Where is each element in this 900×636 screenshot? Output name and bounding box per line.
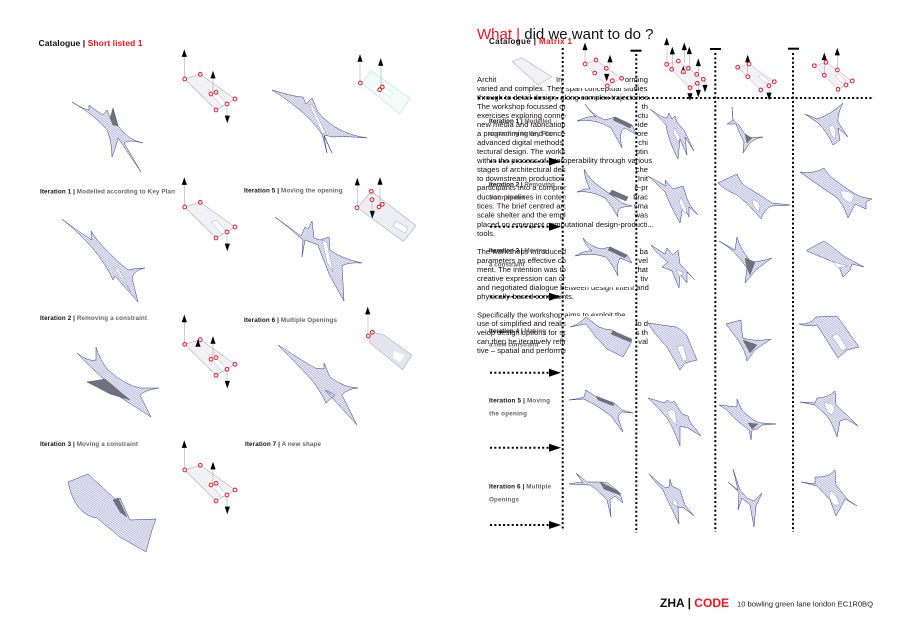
- body text: a programming and concep: [477, 129, 569, 138]
- form: iteration 5 lower surface: [275, 217, 362, 301]
- body text: vel: [638, 256, 648, 265]
- heading: Catalogue Matrix 1: Catalogue | Matrix 1: [489, 37, 573, 46]
- matrix: surfaces row 2: [577, 168, 872, 223]
- form: iteration 5 top surface: [272, 90, 367, 153]
- body text: velop design options for sp: [477, 328, 567, 337]
- body text: hat: [637, 265, 649, 274]
- control diagram: iteration 6: [365, 307, 412, 370]
- matrix: row labels: Iteration 6 | Multiple: [489, 484, 551, 490]
- body text: to downstream production.: [477, 174, 566, 183]
- control diagram: iteration 2: [182, 315, 237, 388]
- heading: Catalogue Short listed 1: Catalogue | Short listed 1: [38, 38, 143, 48]
- title: What did we want to do: What | did we want to do ?: [477, 26, 654, 43]
- body text: The workshop focussed on: [477, 102, 568, 111]
- matrix: row labels: a new constraint: [489, 342, 540, 348]
- body text: ptin: [636, 147, 648, 156]
- matrix: row labels: a constraint: [489, 194, 526, 202]
- matrix: row labels: Iteration 2 | Removing: [489, 182, 555, 188]
- left panel: iteration labels: [40, 188, 343, 448]
- body text: within the process of interoperability through various: [476, 156, 652, 165]
- body text: ctu: [638, 111, 648, 120]
- matrix: surfaces row 3: [575, 237, 864, 288]
- body text: stages of architectural desi: [477, 165, 568, 174]
- left panel: iteration labels: Iteration 2 | Removing a constraint: [40, 315, 148, 322]
- body text: tools.: [477, 229, 495, 238]
- matrix: row labels: a constraint: [489, 262, 526, 268]
- matrix: control diagram column 2: [664, 38, 708, 101]
- matrix: row labels: Iteration 1 | Modelled: [489, 118, 552, 125]
- body text: physically-based constraints.: [477, 292, 574, 301]
- matrix: row labels: Openings: [489, 496, 519, 504]
- body text: tectural design. The worksh: [477, 147, 570, 156]
- control diagram: green plan: [357, 54, 410, 114]
- body text: can then be iteratively refin: [477, 337, 568, 346]
- body text: brac: [633, 193, 648, 202]
- matrix: surfaces row 5: [569, 390, 858, 446]
- body text: ba: [640, 247, 649, 256]
- body text: tive – spatial and performa: [477, 346, 567, 355]
- control diagram: iteration 5: [355, 177, 416, 241]
- body text: through to detail design, along complex trajectories.: [477, 93, 650, 102]
- left panel: iteration labels: Iteration 6 | Multiple Openings: [244, 317, 337, 324]
- form: iteration 1 lower surface: [62, 219, 145, 302]
- body text: tiv: [640, 274, 648, 283]
- body text: placed on emergent computational design-producti...: [477, 220, 654, 229]
- control diagram: iteration 3: [182, 440, 237, 514]
- body text: chi: [638, 138, 648, 147]
- matrix: plan diagram header: [512, 58, 552, 85]
- matrix: dotted grid: [478, 48, 874, 533]
- body text: In: [556, 75, 562, 84]
- matrix: control diagram column 1: [582, 42, 624, 88]
- body text: was: [633, 211, 648, 220]
- body text: duction pipelines in contem: [477, 193, 569, 202]
- body text: and negotiated dialogue between design intent and: [477, 283, 649, 292]
- matrix: row labels: Iteration 5 | Moving: [489, 398, 550, 404]
- body text: use of simplified and realis: [477, 319, 567, 328]
- body text: ide: [638, 120, 648, 129]
- body text: parameters as effective co: [477, 256, 566, 265]
- control diagram: iteration 1 top: [182, 49, 237, 123]
- matrix: row arrows: [490, 158, 561, 529]
- matrix: surfaces row 6: [569, 469, 857, 527]
- body text: val: [638, 337, 648, 346]
- body text: Specifically the workshop aims to exploit the: [477, 311, 626, 320]
- body text: e-pr: [634, 183, 648, 192]
- body text: th: [642, 102, 648, 111]
- matrix: control diagram column 3: [736, 55, 776, 100]
- form: iteration 3 surface: [68, 474, 156, 552]
- control diagram: iteration 1 lower: [182, 177, 237, 251]
- body text: varied and complex. They span conceptual studies: [477, 84, 648, 93]
- body text: ore: [637, 129, 648, 138]
- form: iteration 2 surface: [77, 347, 159, 417]
- body text: Archit: [477, 75, 497, 84]
- body text: che: [636, 165, 648, 174]
- left panel: iteration labels: Iteration 1 | Modelled according to Key Plan: [40, 189, 175, 196]
- matrix: row labels: [489, 118, 555, 504]
- form: iteration 6 surface: [278, 345, 358, 425]
- matrix: surfaces row 1: [577, 103, 848, 159]
- matrix: surfaces row 4: [570, 316, 859, 370]
- body text: orming: [625, 75, 648, 84]
- footer: ZHA CODE address: 10 bowling green lane london EC1R0BQ: [737, 600, 873, 608]
- body text: scale shelter and the emph: [477, 211, 568, 220]
- matrix: row labels: Iteration 3 | Moving: [489, 248, 547, 254]
- left panel: iteration labels: Iteration 3 | Moving a constraint: [40, 441, 139, 448]
- body text: sma: [634, 202, 649, 211]
- body text: participants into a compres: [477, 183, 568, 192]
- matrix: control diagram column 4: [812, 48, 854, 91]
- left panel: iteration labels: Iteration 7 | A new shape: [245, 441, 321, 448]
- body text: advanced digital methods v: [477, 138, 569, 147]
- body text: ment. The intention was to: [477, 265, 566, 274]
- body text: The workshops introduced: [477, 247, 566, 256]
- body text: s th: [636, 328, 648, 337]
- matrix: row labels: according to Key Plan: [489, 130, 555, 138]
- body text: new media and fabrication,: [477, 120, 568, 129]
- matrix: row labels: Iteration 4 | Making: [489, 328, 546, 335]
- body text: exercises exploring connec: [477, 111, 569, 120]
- form: iteration 1 surface: [72, 102, 143, 172]
- body text: creative expression can ch: [477, 274, 567, 283]
- matrix: row labels: the opening: [489, 410, 527, 418]
- body text: tices. The brief centred aro: [477, 202, 567, 211]
- body text: [476, 75, 654, 355]
- footer: ZHA CODE address: ZHA | CODE: [660, 596, 729, 610]
- left panel: iteration labels: Iteration 5 | Moving the opening: [244, 188, 343, 195]
- body text: Init: [638, 174, 649, 183]
- footer: ZHA CODE address: [660, 596, 873, 610]
- body text: to d: [635, 319, 648, 328]
